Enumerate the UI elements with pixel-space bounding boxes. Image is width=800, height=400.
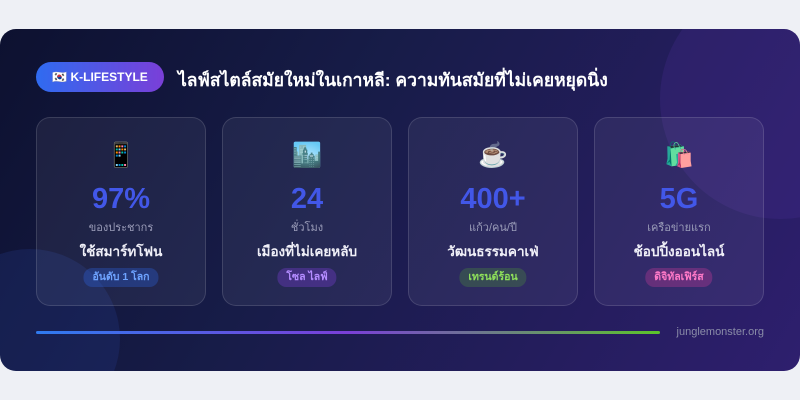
gradient bar (36, 331, 660, 334)
main text: ใช้สมาร์ทโฟน (80, 244, 162, 259)
tag: อันดับ 1 โลก (92, 271, 150, 283)
tag: เทรนด์ร้อน (468, 271, 518, 283)
main text: ช้อปปิ้งออนไลน์ (634, 244, 724, 259)
tag (645, 268, 713, 287)
label: ของประชากร (89, 222, 153, 234)
badge: K-LIFESTYLE: 🇰🇷 K-LIFESTYLE (52, 70, 148, 84)
tag (83, 268, 159, 287)
icon: city: 🏙️ (292, 141, 322, 169)
main text: เมืองที่ไม่เคยหลับ (257, 244, 357, 259)
card: city (222, 117, 392, 306)
label: เครือข่ายแรก (647, 222, 711, 234)
tag (459, 268, 527, 287)
tag: โซล ไลฟ์ (286, 271, 328, 283)
card: coffee (408, 117, 578, 306)
stat number: 24 (291, 183, 323, 215)
stat number: 5G (660, 183, 698, 215)
icon: coffee: ☕️ (478, 141, 508, 169)
icon: phone: 📱 (106, 141, 136, 169)
card: smartphone (36, 117, 206, 306)
stat number: 97% (92, 183, 150, 215)
card: shopping (594, 117, 764, 306)
label: ชั่วโมง (291, 222, 323, 234)
label: แก้ว/คน/ปี (469, 222, 517, 234)
stat number: 400+ (460, 183, 526, 215)
icon: shopping bags: 🛍️ (664, 141, 694, 169)
badge: K-LIFESTYLE (36, 62, 164, 92)
tag (277, 268, 337, 287)
tag: ดิจิทัลเฟิร์ส (654, 271, 704, 283)
title: ไลฟ์สไตล์สมัยใหม่ในเกาหลี: ความทันสมัยที่ไม่เคยหยุดนิ่ง (178, 70, 608, 90)
main text: วัฒนธรรมคาเฟ่ (447, 244, 539, 259)
footer source: junglemonster.org (677, 326, 764, 338)
